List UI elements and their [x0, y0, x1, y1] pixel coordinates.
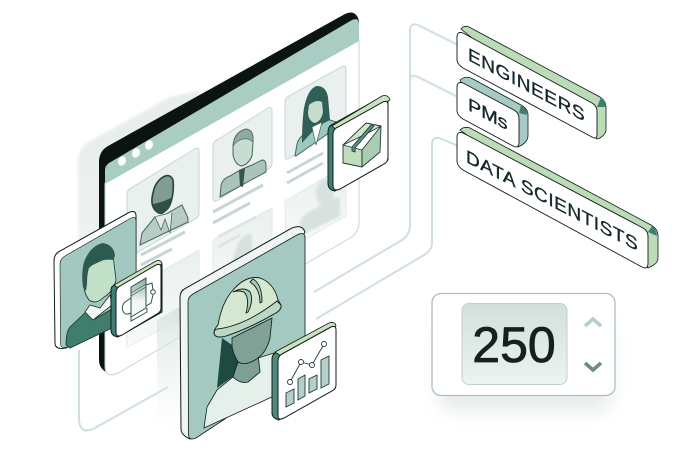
chart icon card [272, 322, 336, 420]
value: 250 [472, 317, 556, 373]
worker head [232, 318, 272, 364]
window header bar [105, 19, 359, 184]
box icon card [328, 96, 390, 191]
worker hair [217, 338, 238, 388]
worker body [204, 353, 274, 428]
window body [105, 40, 359, 375]
puzzle icon [122, 278, 155, 321]
connector lines [79, 24, 458, 430]
window black frame [99, 13, 359, 372]
chevron down [585, 363, 601, 370]
profile card: woman [285, 66, 346, 159]
profile card: man with tie [213, 107, 272, 201]
hard hat [214, 278, 281, 337]
browser window [99, 13, 359, 375]
helmet worker card [180, 227, 305, 439]
window dots [117, 139, 154, 167]
left person body [66, 309, 112, 348]
chevron up [585, 319, 601, 326]
left person collar [85, 295, 112, 320]
faded silhouettes [232, 179, 340, 272]
label: PMs [457, 77, 528, 147]
label: data scientists [457, 127, 658, 268]
data scientists text: DATA SCIENTISTS [466, 147, 638, 256]
left person hair [82, 243, 115, 291]
bearded man head [152, 176, 173, 213]
chart trend line [288, 342, 326, 384]
stepper widget [432, 294, 615, 410]
left person face [84, 255, 116, 302]
PMs text: PMs [468, 95, 508, 135]
worker neck [233, 354, 260, 382]
engineers text: ENGINEERS [468, 45, 585, 126]
box icon [343, 123, 381, 167]
chart bars [286, 356, 329, 407]
background shadow panel [78, 90, 200, 330]
label: engineers [457, 26, 606, 139]
puzzle icon card [111, 260, 162, 337]
bearded man body [140, 205, 188, 245]
left person card [54, 212, 136, 348]
card text lines [141, 153, 323, 265]
profile card: bearded man [127, 148, 199, 256]
faded profile cards [127, 165, 346, 347]
vertical card shadow [157, 305, 182, 432]
number field [462, 304, 567, 384]
